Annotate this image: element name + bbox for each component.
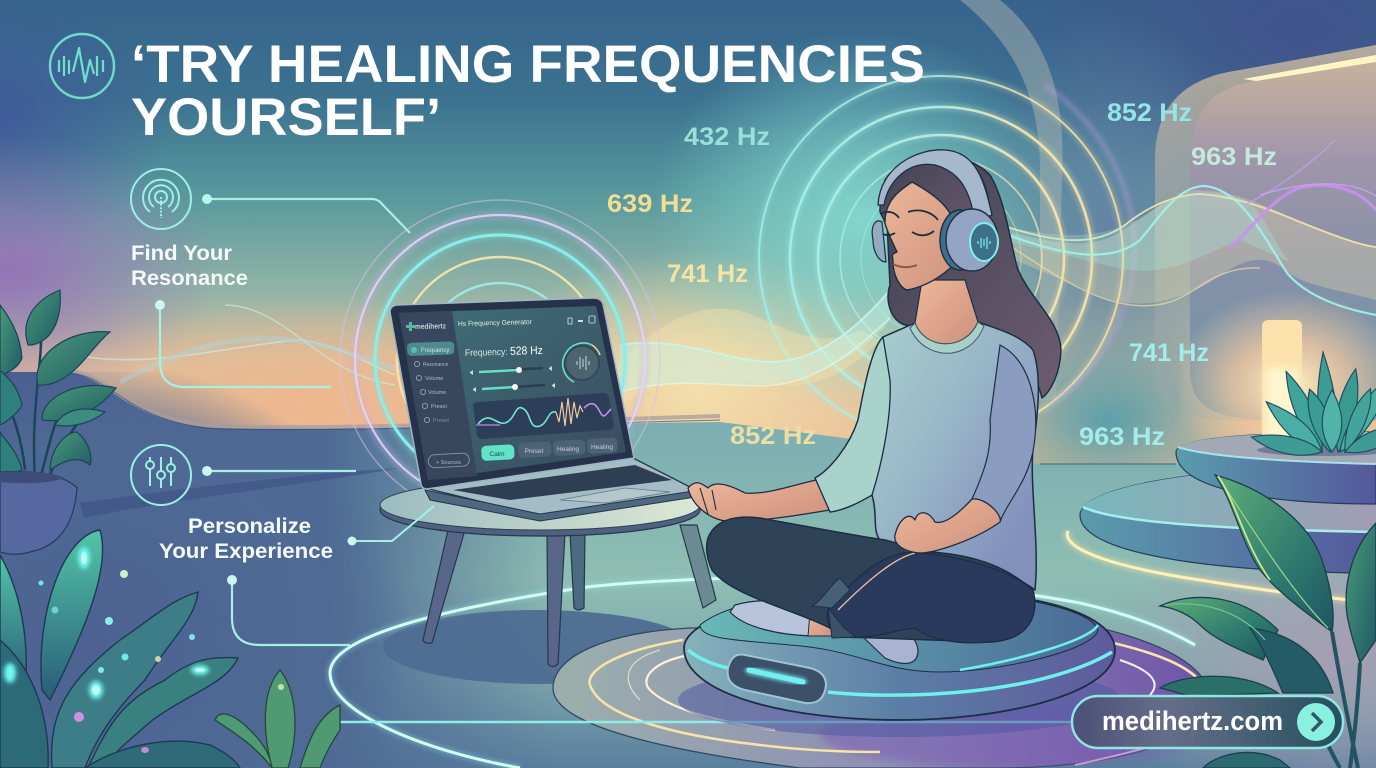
frequency labels: 432 Hz xyxy=(684,123,770,151)
icon: resonance xyxy=(131,169,191,229)
laptop base xyxy=(425,458,700,516)
laptop buttons: Healing xyxy=(557,446,579,453)
laptop header: Hs Frequency Generator xyxy=(458,319,533,328)
sound wave ribbons left xyxy=(75,305,395,385)
title: ‘TRY HEALING FREQUENCIES xyxy=(131,35,925,94)
laptop: Volume xyxy=(425,376,443,382)
sound wave ribbons right xyxy=(1000,140,1376,315)
laptop xyxy=(390,298,702,521)
laptop: Volume xyxy=(428,390,446,396)
frequency labels: 741 Hz xyxy=(667,260,748,288)
callout line: sliders to laptop xyxy=(202,466,356,476)
headphones xyxy=(872,150,998,271)
sock left xyxy=(730,601,815,636)
left sleeve xyxy=(815,337,890,512)
laptop buttons xyxy=(481,437,618,461)
callout line: personalize to table xyxy=(348,506,434,546)
frequency labels: 852 Hz xyxy=(730,422,816,450)
hair front xyxy=(880,154,989,240)
title xyxy=(131,35,925,147)
floor disc and rings xyxy=(553,628,1211,768)
laptop buttons: Preset xyxy=(525,448,544,455)
bottom-left glowing plant xyxy=(0,530,240,768)
laptop sliders xyxy=(470,366,555,392)
laptop buttons: Calm xyxy=(489,451,505,458)
website button xyxy=(1072,696,1343,748)
label: find your resonance xyxy=(131,242,248,290)
back hair xyxy=(885,155,1061,398)
sound wave ribbons centre xyxy=(610,290,890,412)
laptop screen xyxy=(390,298,634,489)
laptop: Preset xyxy=(433,418,449,424)
plant pot xyxy=(0,471,77,554)
frequency labels: 639 Hz xyxy=(607,190,693,218)
floor xyxy=(0,370,1376,768)
label: personalize your experience xyxy=(159,515,333,563)
laptop frequency readout: Frequency: 528 Hz xyxy=(465,345,543,359)
neckline xyxy=(910,322,984,353)
laptop waveform xyxy=(473,393,614,439)
trouser cuff xyxy=(828,608,856,638)
right hand and forearm xyxy=(895,499,1000,553)
stems xyxy=(1310,632,1360,768)
right sleeve xyxy=(972,345,1036,522)
frequency arcs around laptop xyxy=(340,200,660,520)
side table xyxy=(380,480,716,666)
website button: medihertz.com xyxy=(1102,706,1283,736)
label: find your resonance: Find Your xyxy=(131,242,232,265)
bottom-centre small plant xyxy=(215,670,340,768)
left hand and forearm xyxy=(688,480,830,521)
laptop: + Sources xyxy=(436,460,461,466)
glow spots on plant xyxy=(4,547,209,753)
title: YOURSELF’ xyxy=(131,88,441,147)
frequency labels xyxy=(607,99,1277,451)
laptop: medihertz xyxy=(415,321,446,331)
laptop: Frequency xyxy=(421,348,449,354)
table shadow xyxy=(383,610,693,684)
callout line: lower floor xyxy=(227,575,350,645)
icon: sliders xyxy=(131,445,191,505)
frequency arcs around head xyxy=(759,76,1134,440)
callout line: resonance down to laptop xyxy=(155,300,331,387)
label: find your resonance: Resonance xyxy=(131,267,248,290)
laptop buttons: Healing xyxy=(591,444,613,451)
legs xyxy=(707,517,1035,642)
frequency labels: 963 Hz xyxy=(1191,143,1277,171)
cushion xyxy=(678,590,1122,737)
neck xyxy=(915,280,978,344)
laptop dial xyxy=(563,343,600,382)
table lamp xyxy=(1262,320,1302,442)
label: personalize your experience: Your Experience xyxy=(159,540,333,563)
frequency labels: 852 Hz xyxy=(1107,99,1192,127)
sock right xyxy=(862,629,918,663)
large floor ring xyxy=(330,577,1195,768)
laptop sidebar xyxy=(399,311,477,480)
torso xyxy=(815,322,1038,590)
woman meditating xyxy=(678,150,1122,737)
frequency labels: 741 Hz xyxy=(1129,339,1209,367)
callout line: find your resonance to laptop xyxy=(202,194,410,233)
label: personalize your experience: Personalize xyxy=(188,515,311,538)
logo icon: sound wave xyxy=(50,34,114,98)
succulent plant xyxy=(1250,352,1376,461)
face details xyxy=(881,210,938,267)
frequency labels: 963 Hz xyxy=(1079,423,1165,451)
top-left plant xyxy=(0,290,116,480)
laptop: Resonance xyxy=(423,362,449,368)
face xyxy=(883,170,967,290)
bottom-right plant xyxy=(1160,475,1376,768)
right architecture alcove xyxy=(1155,45,1376,460)
right steps platforms xyxy=(1067,432,1376,600)
laptop: Preset xyxy=(431,404,447,410)
curved wall band xyxy=(960,0,1063,400)
